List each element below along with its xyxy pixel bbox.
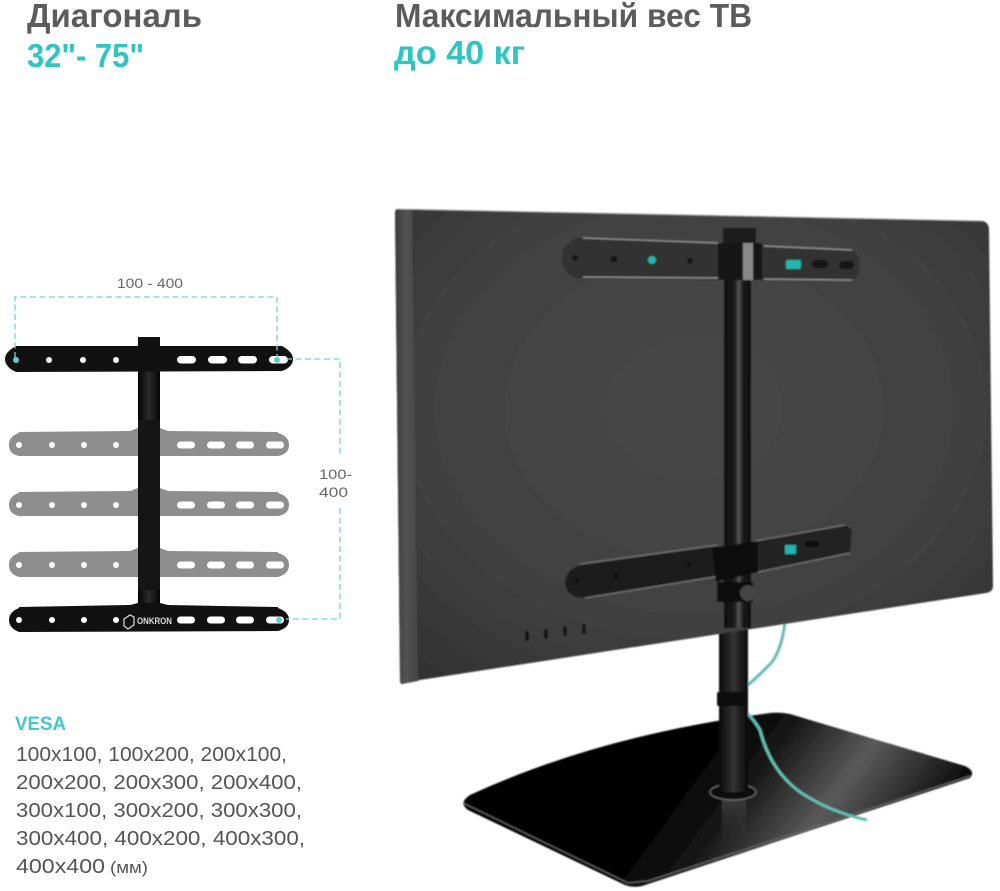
bottom plate (black) with ONKRON logo: ONKRON <box>137 616 172 626</box>
horizontal dimension line <box>15 275 277 358</box>
vertical dimension line <box>286 359 352 619</box>
top plate (black) <box>5 337 293 372</box>
VESA list: 300x100, 300x200, 300x300, <box>16 800 302 822</box>
adjustable plates (grey positions) <box>9 420 289 590</box>
VESA list: 300x400, 400x200, 400x300, <box>16 828 305 850</box>
heading: diagonal <box>27 0 202 74</box>
cable lower <box>737 704 867 820</box>
glass base <box>463 713 972 887</box>
heading: maximum TV weight <box>394 0 752 71</box>
VESA list: 100x100, 100x200, 200x100, <box>16 744 287 766</box>
VESA list: 200x200, 200x300, 200x400, <box>16 772 302 794</box>
VESA list: 400x400 <box>16 856 105 878</box>
diagram pole <box>138 337 160 607</box>
monitor back panel <box>395 209 993 684</box>
heading: diagonal: 32"- 75" <box>27 37 144 74</box>
upper pole <box>724 228 751 628</box>
horizontal dimension line: 100 - 400 <box>117 275 183 291</box>
lower pole <box>710 600 756 800</box>
top bracket <box>562 228 860 280</box>
vertical dimension line: 100- <box>319 466 352 482</box>
vertical dimension line: 400 <box>319 484 348 500</box>
VESA list: VESA <box>15 714 66 735</box>
bottom bracket <box>565 525 852 602</box>
bottom plate (black) with ONKRON logo <box>9 603 289 632</box>
VESA list: (мм) <box>110 858 148 877</box>
product: monitor on stand <box>395 209 993 887</box>
heading: maximum TV weight: до 40 кг <box>394 34 525 71</box>
cable upper <box>742 622 785 690</box>
VESA mount diagram <box>5 275 352 632</box>
VESA list <box>15 714 305 878</box>
